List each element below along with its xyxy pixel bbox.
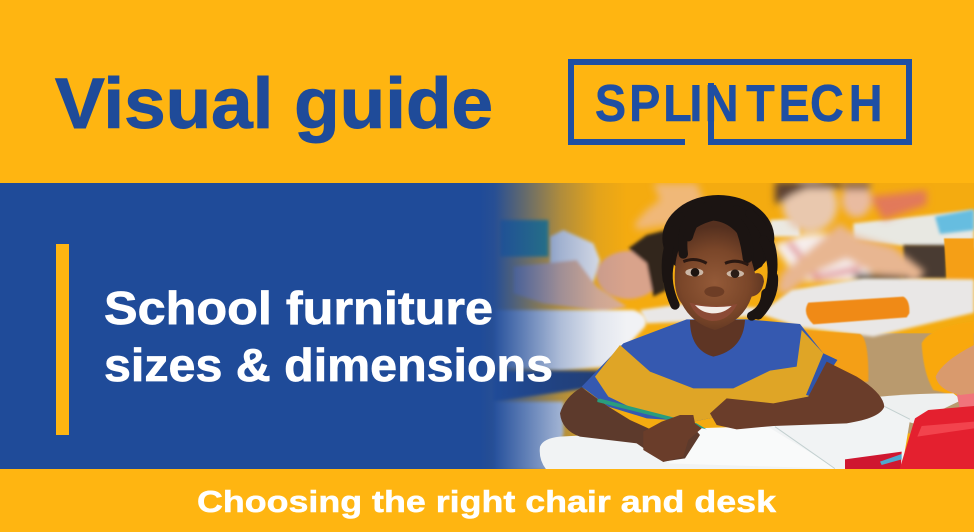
- red pencil case: [845, 393, 974, 469]
- boy smile: [689, 303, 737, 321]
- pencil: [597, 399, 707, 429]
- left desk: [493, 310, 646, 371]
- panel heading: School furniture: [104, 282, 493, 334]
- panel heading: [104, 282, 553, 391]
- boy nose: [704, 286, 724, 297]
- logo: Splintech: SPLINTECH: [595, 75, 882, 133]
- boy hair back: [662, 195, 774, 272]
- left fade to blue: [480, 183, 612, 469]
- accent bar: [56, 244, 69, 435]
- right sleeve stripe: [806, 353, 837, 397]
- classroom background: [480, 178, 974, 473]
- boy: [560, 195, 884, 462]
- orange pencil case: [806, 297, 909, 324]
- header band: [0, 0, 974, 183]
- footer band: [0, 469, 974, 532]
- title panel: [0, 183, 974, 469]
- boy shirt: [582, 319, 837, 422]
- boy face: [675, 221, 764, 330]
- boy neck: [690, 320, 745, 357]
- shirt yellow bands: [595, 330, 823, 422]
- right desk: [640, 278, 974, 337]
- footer caption: Choosing the right chair and desk: [197, 484, 777, 519]
- title: Visual guide: [55, 65, 493, 144]
- sleeping child: [513, 230, 667, 312]
- orange chairs: [800, 330, 868, 383]
- right-hand neighbour arm: [936, 345, 974, 395]
- boy eyebrows: [683, 260, 748, 265]
- back desk: [853, 210, 974, 248]
- logo: Splintech: [571, 62, 909, 142]
- boy hand: [643, 415, 702, 462]
- boy left arm: [560, 387, 700, 462]
- boy right arm: [710, 362, 884, 429]
- boy dreadlocks: [666, 205, 773, 316]
- front desks: [540, 393, 962, 470]
- blurred children: [635, 178, 927, 295]
- photo: smiling boy at a classroom desk: [480, 178, 974, 473]
- panel heading: sizes & dimensions: [104, 339, 553, 391]
- boy eyes: [685, 268, 744, 278]
